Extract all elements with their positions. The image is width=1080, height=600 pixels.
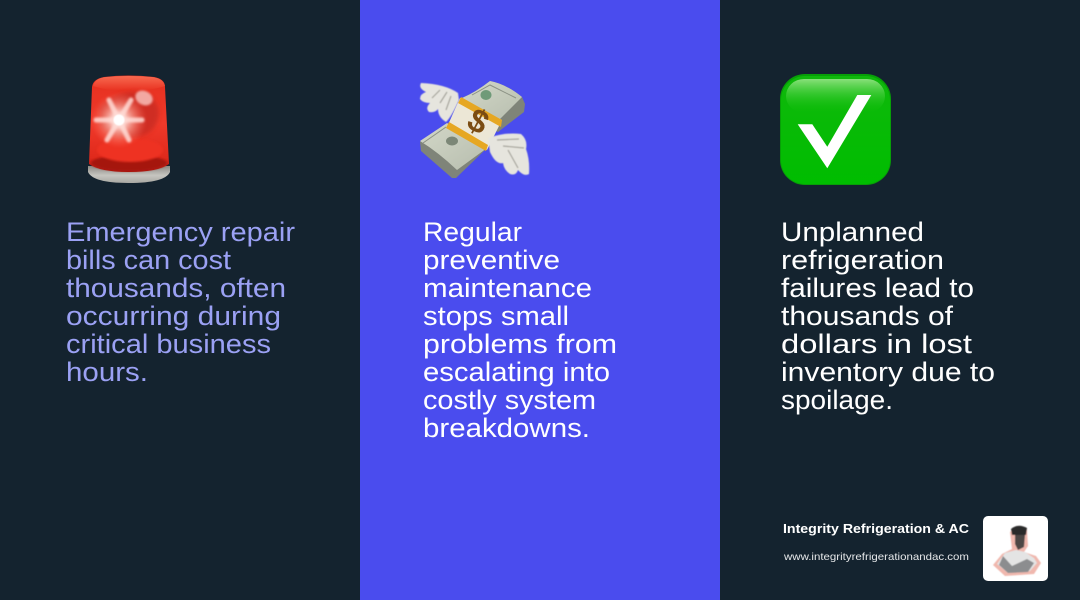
text: emergency repair bills: bills can cost [66,245,232,275]
bottom bill stack [420,123,487,178]
icon: green check mark [780,74,891,185]
text: unplanned failures: thousands of [781,301,954,331]
text: unplanned failures: failures lead to [781,273,974,303]
text: unplanned failures: spoilage. [781,385,893,415]
text: unplanned failures: Unplanned [781,217,924,247]
text: preventive maintenance: maintenance [423,273,592,303]
logo: technician portrait [983,516,1048,581]
footer: company name: Integrity Refrigeration & AC [783,521,970,536]
lower wing [488,134,529,175]
panel: right background [720,0,1080,600]
icon: money with wings [420,81,529,178]
text: unplanned failures: dollars in lost [781,329,973,359]
text: emergency repair bills [66,217,295,387]
text: emergency repair bills: thousands, often [66,273,286,303]
text: emergency repair bills: Emergency repair [66,217,295,247]
text: preventive maintenance: costly system [423,385,596,415]
footer: website url: www.integrityrefrigerationandac.com [783,551,969,563]
text: preventive maintenance: escalating into [423,357,610,387]
text: preventive maintenance: stops small [423,301,569,331]
text: unplanned failures: refrigeration [781,245,944,275]
text: emergency repair bills: hours. [66,357,148,387]
text: emergency repair bills: occurring during [66,301,281,331]
text: unplanned failures [781,217,995,415]
dollar sign: $ [462,100,495,141]
text: preventive maintenance: breakdowns. [423,413,590,443]
text: preventive maintenance [423,217,617,443]
yellow straps [458,97,502,127]
panel: left background [0,0,360,600]
text: preventive maintenance: preventive [423,245,560,275]
panel: middle background [360,0,720,600]
icon: red siren [88,76,170,183]
upper wing [420,83,459,122]
text: emergency repair bills: critical business [66,329,271,359]
text: preventive maintenance: Regular [423,217,522,247]
text: unplanned failures: inventory due to [781,357,995,387]
paper band [447,98,502,150]
text: preventive maintenance: problems from [423,329,617,359]
top bill stack [462,81,525,132]
